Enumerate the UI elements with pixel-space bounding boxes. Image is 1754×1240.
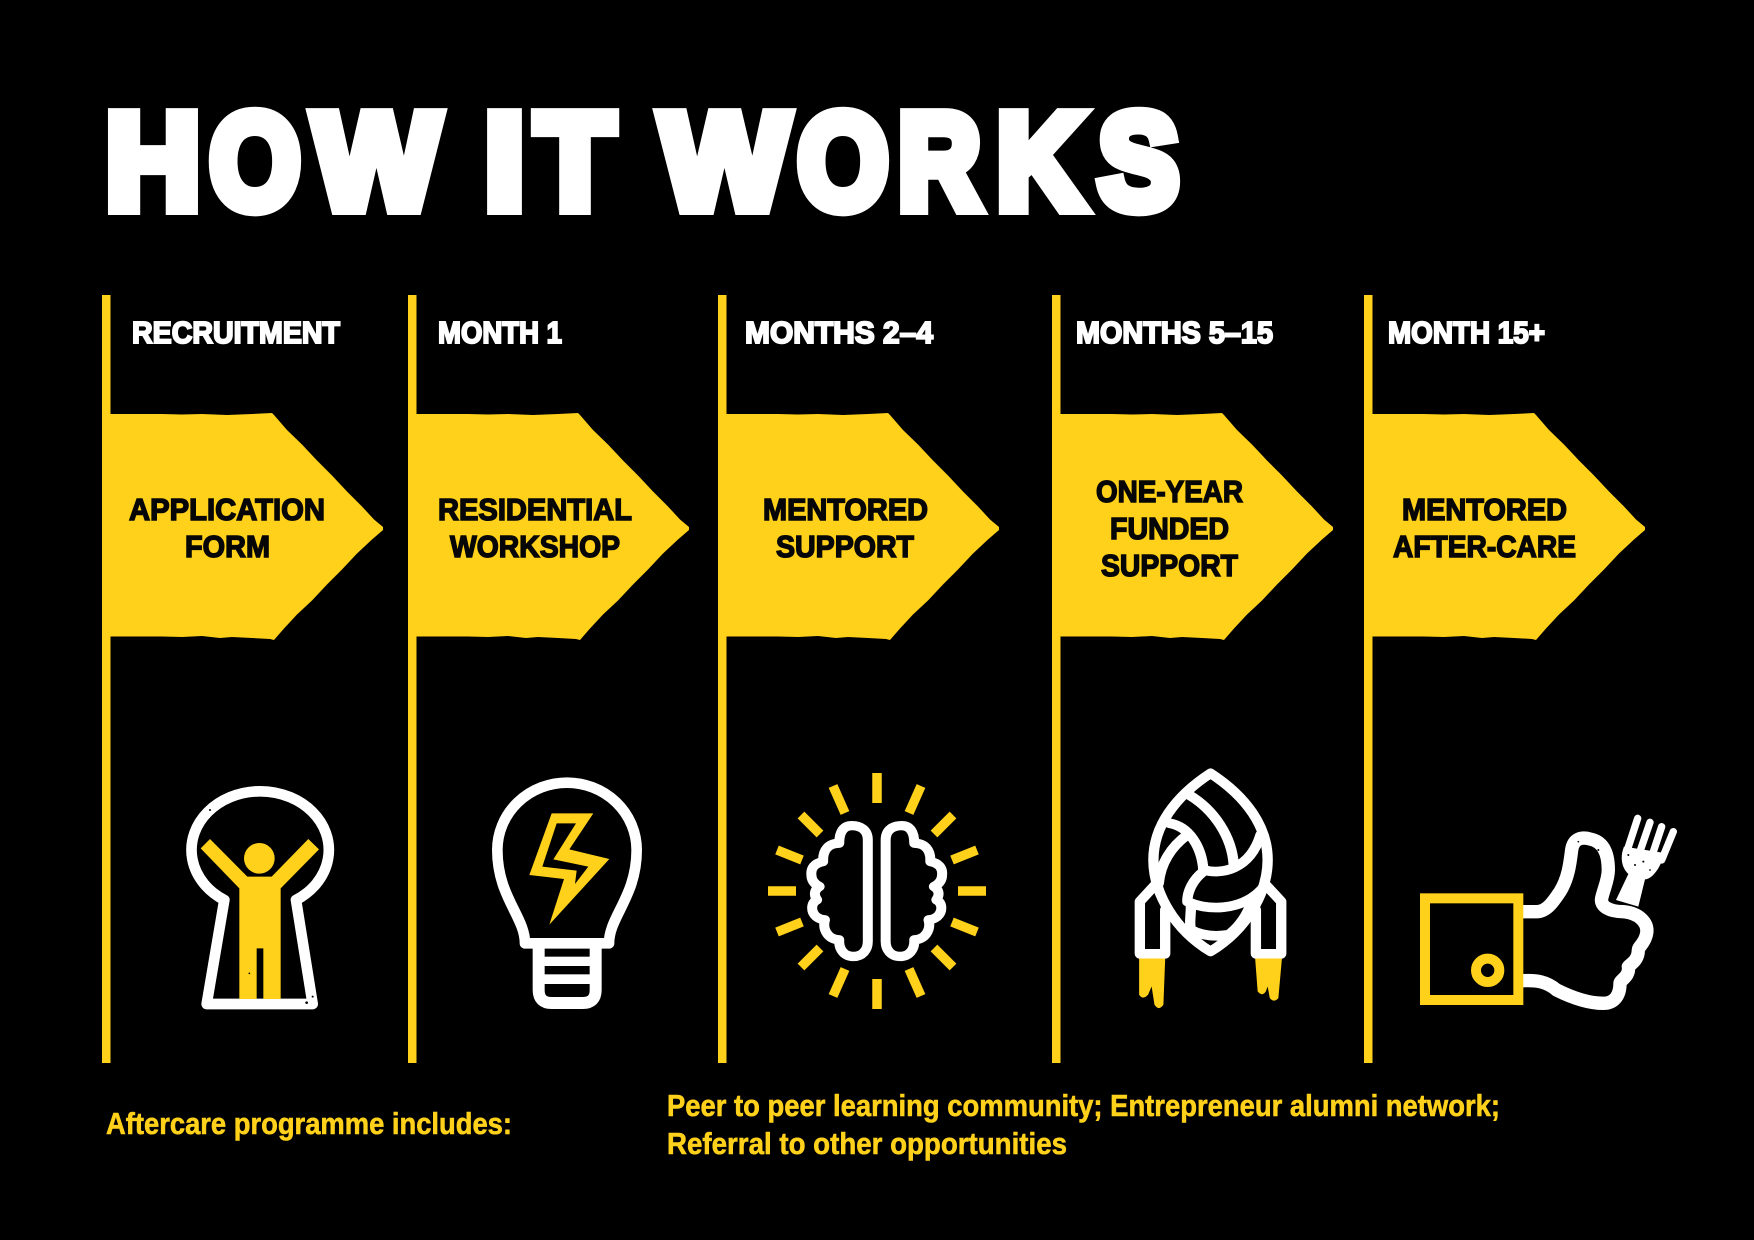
title: O bbox=[210, 86, 300, 237]
panel: recruitment bbox=[102, 295, 383, 1063]
arrow with label: FORM bbox=[185, 529, 270, 564]
title: R bbox=[898, 86, 980, 237]
footer: aftercare heading: Aftercare programme includes: bbox=[106, 1106, 512, 1141]
timeline line bbox=[1052, 295, 1060, 1063]
arrow with label: RESIDENTIAL bbox=[438, 492, 632, 527]
arrow with label: MENTORED bbox=[763, 492, 928, 527]
arrow with label: MENTORED bbox=[1402, 492, 1567, 527]
title: T bbox=[536, 86, 614, 237]
timeline line bbox=[408, 295, 416, 1063]
column heading: MONTH 15+ bbox=[1388, 315, 1545, 350]
arrow with label: ONE-YEAR bbox=[1096, 474, 1243, 509]
timeline line bbox=[1364, 295, 1372, 1063]
panel: month 15+ bbox=[1364, 295, 1673, 1063]
panel: months 5-15 bbox=[1052, 295, 1333, 1063]
title: H bbox=[106, 86, 200, 237]
title: I bbox=[485, 86, 524, 237]
title: W bbox=[314, 86, 440, 237]
footer: aftercare details: Referral to other opportunities bbox=[667, 1126, 1067, 1161]
title: W bbox=[661, 86, 789, 237]
column heading: MONTH 1 bbox=[438, 315, 562, 350]
footer: aftercare details: Peer to peer learning community; Entrepreneur alumni network; bbox=[667, 1088, 1500, 1123]
arrow with label bbox=[408, 413, 689, 640]
panel: months 2-4 bbox=[718, 295, 999, 1063]
arrow with label: FUNDED bbox=[1110, 511, 1229, 546]
icon: person in keyhole bbox=[191, 791, 329, 1004]
arrow with label: APPLICATION bbox=[129, 492, 325, 527]
arrow with label bbox=[1364, 413, 1645, 640]
icon: brain with rays bbox=[768, 773, 986, 1009]
column heading: MONTHS 2–4 bbox=[745, 315, 934, 350]
arrow with label: SUPPORT bbox=[1101, 548, 1238, 583]
arrow with label: AFTER-CARE bbox=[1393, 529, 1576, 564]
icon: volleyball rocket bbox=[1139, 773, 1282, 1008]
arrow with label bbox=[102, 413, 383, 640]
timeline line bbox=[718, 295, 726, 1063]
arrow with label bbox=[718, 413, 999, 640]
arrow with label: WORKSHOP bbox=[450, 529, 620, 564]
panel: month 1 bbox=[408, 295, 689, 1063]
footer: aftercare details bbox=[667, 1088, 1500, 1161]
arrow with label: SUPPORT bbox=[776, 529, 914, 564]
title: K bbox=[997, 86, 1084, 237]
timeline line bbox=[102, 295, 110, 1063]
column heading: RECRUITMENT bbox=[132, 315, 340, 350]
title: S bbox=[1099, 86, 1179, 237]
icon: light bulb with lightning bolt bbox=[497, 783, 637, 1003]
title: O bbox=[798, 86, 888, 237]
column heading: MONTHS 5–15 bbox=[1076, 315, 1273, 350]
arrow with label bbox=[1052, 413, 1333, 640]
icon: thumbs-up hand holding fork bbox=[1425, 818, 1673, 1003]
